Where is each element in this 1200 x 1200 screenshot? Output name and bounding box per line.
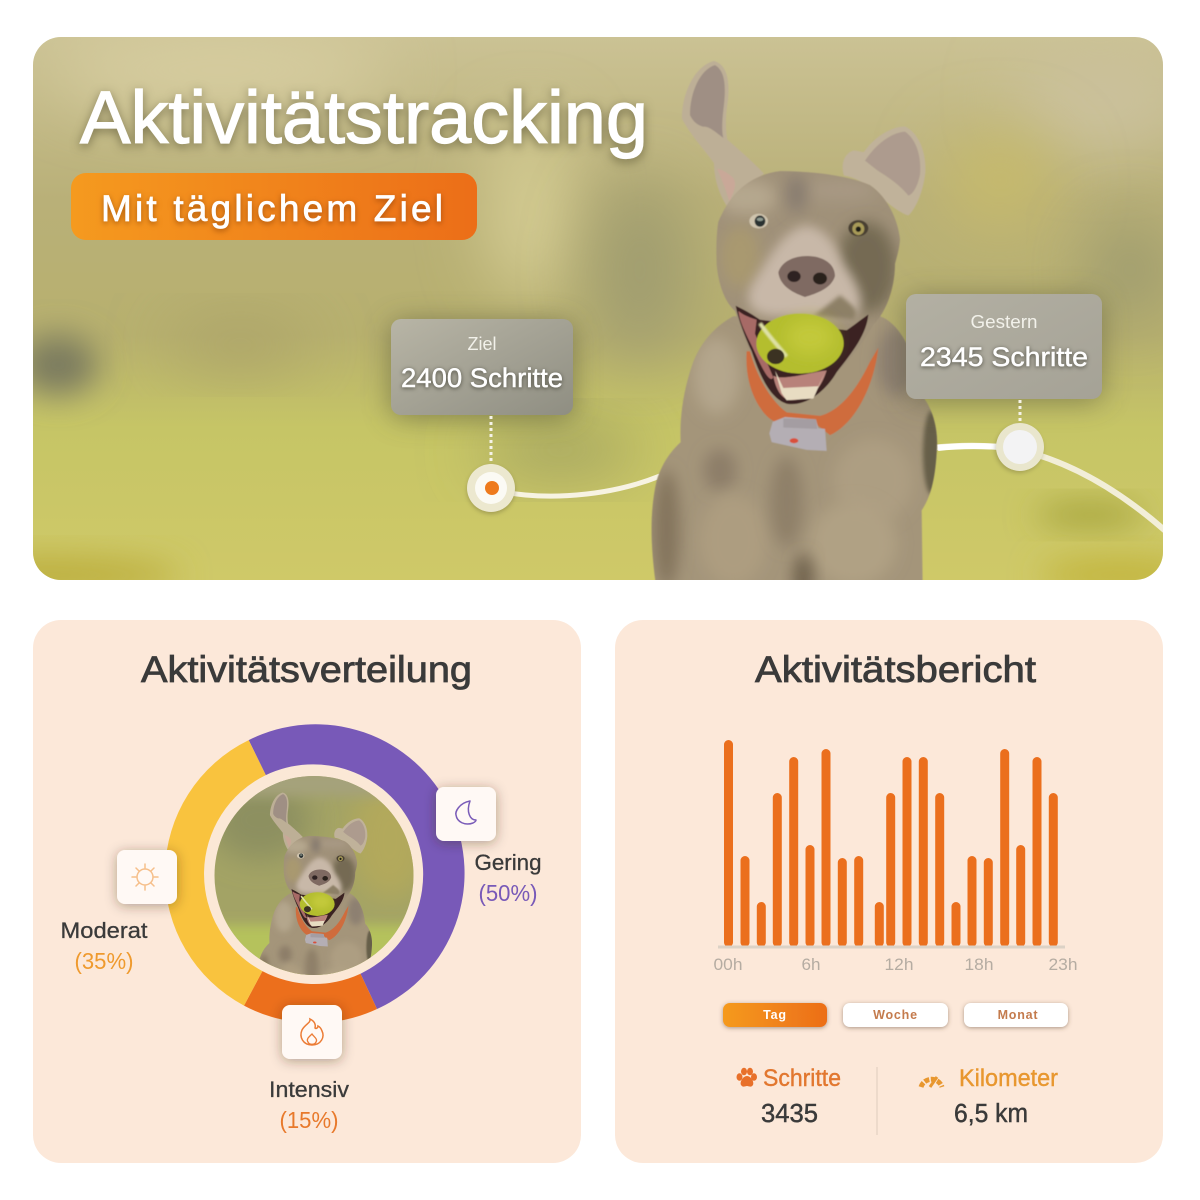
activity line left [491, 476, 660, 496]
segment: Intensiv 15% [244, 971, 377, 1023]
icon: paw [736, 1068, 757, 1087]
panel: hero photo [33, 37, 1163, 580]
axis labels: 23h [1048, 955, 1078, 974]
donut chart [165, 724, 465, 1023]
button: Woche: Woche [873, 1008, 918, 1022]
stat: Kilometer: Kilometer [959, 1065, 1058, 1092]
axis labels: 00h [714, 955, 742, 974]
callout: yesterday: Gestern [970, 312, 1038, 332]
panel: Aktivitätsbericht [615, 620, 1163, 1163]
label: Moderat: (35%) [74, 948, 134, 974]
callout: yesterday [906, 294, 1102, 402]
label: Intensiv: (15%) [280, 1107, 338, 1133]
button: Woche [843, 1003, 948, 1027]
center photo of dog [214, 776, 414, 975]
button: Tag [723, 1003, 827, 1027]
label: Gering: Gering [474, 850, 542, 875]
button: Monat: Monat [998, 1008, 1038, 1022]
button: Tag: Tag [763, 1008, 787, 1022]
hero background [0, 30, 1200, 593]
callout: goal: 2400 Schritte [401, 363, 563, 393]
axis labels [714, 955, 1078, 974]
marker: goal [467, 464, 515, 514]
label: Moderat: Moderat [60, 918, 148, 943]
dog photo [652, 61, 940, 603]
panel: Aktivitätsverteilung [33, 620, 581, 1163]
connector: goal [490, 416, 492, 468]
stat: Schritte: Schritte [763, 1065, 841, 1092]
heading: distribution: Aktivitätsverteilung [141, 649, 472, 690]
stat: Schritte [736, 1065, 841, 1128]
bar chart [724, 740, 1058, 947]
axis labels: 12h [884, 955, 914, 974]
segment: Moderat 35% [165, 740, 266, 1006]
label: Gering [474, 850, 542, 906]
line segment in front of dog edge [938, 446, 1020, 449]
label: Moderat [60, 918, 148, 974]
callout: goal: Ziel [468, 334, 496, 354]
button: Monat [964, 1003, 1068, 1027]
activity line right [930, 446, 1170, 535]
heading: report: Aktivitätsbericht [755, 649, 1037, 690]
stat: Kilometer: 6,5 km [954, 1100, 1028, 1128]
segment: Gering 50% [249, 724, 465, 1009]
callout: goal [391, 319, 573, 418]
callout: yesterday: 2345 Schritte [920, 342, 1088, 372]
title: Aktivitätstracking [80, 76, 648, 159]
badge: daily goal: Mit täglichem Ziel [101, 188, 443, 229]
stat: Kilometer [921, 1065, 1058, 1128]
connector: yesterday [1018, 400, 1022, 425]
icon card: moon [436, 787, 496, 841]
axis labels: 6h [802, 955, 820, 974]
stat: Schritte: 3435 [761, 1100, 818, 1128]
badge: daily goal [71, 173, 477, 240]
icon card: flame [282, 1005, 342, 1059]
label: Gering: (50%) [478, 880, 538, 906]
label: Intensiv: Intensiv [269, 1077, 350, 1102]
label: Intensiv [269, 1077, 350, 1133]
axis labels: 18h [964, 955, 994, 974]
marker: yesterday [995, 423, 1044, 473]
icon: gauge [921, 1077, 942, 1087]
icon card: sun [117, 850, 177, 904]
